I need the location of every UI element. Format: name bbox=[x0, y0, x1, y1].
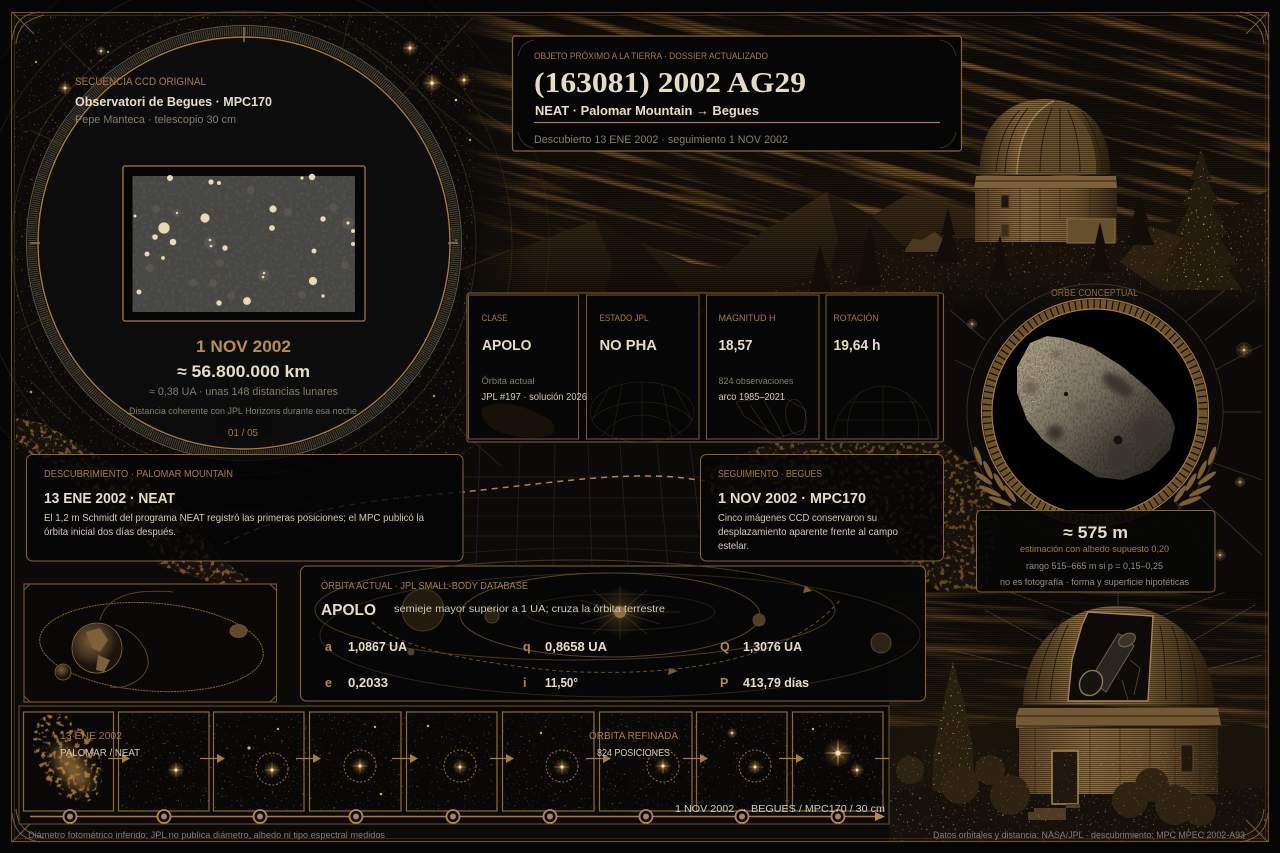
size estimate: estimación con albedo supuesto 0,20 bbox=[1020, 544, 1169, 555]
kicker: OBJETO PRÓXIMO A LA TIERRA · DOSSIER ACTUALIZADO bbox=[534, 51, 768, 62]
distance note: Distancia coherente con JPL Horizons durante esa noche bbox=[129, 406, 357, 417]
map: europe texture bbox=[700, 443, 1000, 602]
orbital elements: 1,3076 UA bbox=[743, 640, 802, 654]
title text: (163081) 2002 AG29 bbox=[534, 67, 806, 99]
icon: star globe sketch bbox=[833, 386, 932, 438]
timeline frames bbox=[24, 712, 883, 811]
dates: Descubierto 13 ENE 2002 · seguimiento 1 NOV 2002 bbox=[534, 134, 788, 146]
map: north america texture bbox=[16, 418, 252, 584]
stat: magnitud: MAGNITUD H bbox=[718, 313, 776, 324]
disclaimer: no es fotografía · forma y superficie hipotéticas bbox=[1000, 577, 1189, 588]
background: grid between panels bbox=[463, 444, 700, 566]
icon: cypress tree texture bbox=[932, 663, 972, 792]
stat: clase: APOLO bbox=[482, 338, 532, 354]
detection stars bbox=[167, 725, 864, 795]
stat: clase: JPL #197 · solución 2026 bbox=[482, 391, 587, 403]
follow-up body: desplazamiento aparente frente al campo bbox=[718, 526, 898, 538]
map: europe bbox=[700, 443, 1000, 602]
orbital elements: 413,79 días bbox=[743, 676, 809, 690]
panel: title bbox=[512, 36, 962, 151]
discovery body: El 1,2 m Schmidt del programa NEAT registró las primeras posiciones; el MPC publicó la bbox=[44, 512, 424, 524]
stat: clase bbox=[482, 313, 587, 403]
follow-up body: Cinco imágenes CCD conservaron su bbox=[718, 512, 877, 524]
icon: cypress tree bbox=[932, 660, 974, 798]
background: engraved sky and mountains bbox=[466, 14, 1270, 311]
panel: current orbit bbox=[300, 560, 926, 701]
follow-up kicker: SEGUIMIENTO · BEGUES bbox=[718, 469, 822, 480]
panel: follow-up bbox=[700, 454, 944, 561]
icon: telescope sketch bbox=[736, 396, 809, 438]
follow-up body: estelar. bbox=[718, 540, 749, 552]
orbital elements: 11,50° bbox=[545, 676, 578, 690]
timeline start label: 13 ENE 2002 bbox=[60, 730, 122, 742]
icon: bushes bbox=[889, 750, 1219, 830]
panel: orbe conceptual background rays bbox=[950, 284, 1262, 560]
stat: estado: ESTADO JPL bbox=[600, 313, 648, 324]
stat: magnitud bbox=[718, 313, 794, 403]
stat: rotacion: 19,64 h bbox=[834, 338, 880, 354]
icon: asteroid marker bbox=[230, 624, 247, 638]
timeline middle label: ÓRBITA REFINADA bbox=[589, 729, 678, 742]
size value: ≈ 575 m bbox=[1063, 524, 1128, 542]
stat: estado bbox=[600, 313, 658, 354]
panel: discovery bbox=[26, 454, 463, 561]
panel: CCD sequence medallion bbox=[26, 26, 462, 460]
orbit illustration bbox=[315, 560, 920, 697]
timeline middle label: 824 POSICIONES bbox=[597, 748, 670, 759]
orbital elements: Q bbox=[720, 640, 730, 654]
stat: magnitud: 824 observaciones bbox=[718, 376, 794, 387]
orbital elements bbox=[325, 640, 809, 690]
stat: magnitud: 18,57 bbox=[718, 338, 752, 354]
arrow: dashed path discovery to follow-up bbox=[224, 476, 705, 544]
sequence counter bbox=[215, 417, 272, 439]
map: north america bbox=[16, 418, 252, 584]
medallion kicker: SECUENCIA CCD ORIGINAL bbox=[75, 76, 206, 88]
orbital elements: q bbox=[523, 640, 531, 654]
icon: upper observatory bbox=[974, 99, 1117, 243]
arrows between frames bbox=[108, 754, 889, 763]
timeline start label bbox=[60, 730, 140, 759]
distance in AU: ≈ 0,38 UA · unas 148 distancias lunares bbox=[149, 386, 338, 398]
timeline end label: 1 NOV 2002 → BEGUES / MPC170 / 30 cm bbox=[675, 803, 885, 815]
stat: clase: CLASE bbox=[482, 313, 508, 324]
orbit kicker: ÓRBITA ACTUAL · JPL SMALL-BODY DATABASE bbox=[321, 579, 528, 592]
star specks bbox=[119, 713, 883, 810]
discovery heading: 13 ENE 2002 · NEAT bbox=[44, 491, 175, 507]
icon: dome sketch bbox=[590, 382, 694, 442]
orbital elements: i bbox=[523, 676, 526, 690]
icon: earth bbox=[72, 623, 122, 673]
panel: asteroid orb bbox=[982, 298, 1208, 526]
panel: asteroid size bbox=[976, 510, 1215, 592]
orbital elements: e bbox=[325, 676, 332, 690]
stat: rotacion bbox=[834, 313, 880, 354]
orbit class: APOLO bbox=[321, 602, 376, 619]
icon: small moon bbox=[55, 664, 71, 680]
orbit description: semieje mayor superior a 1 UA; cruza la órbita terrestre bbox=[394, 603, 665, 615]
background: star chart bbox=[0, 0, 549, 548]
discovery kicker: DESCUBRIMIENTO · PALOMAR MOUNTAIN bbox=[44, 469, 233, 480]
background: lower right landscape with observatory bbox=[889, 592, 1268, 842]
stat: rotacion: ROTACIÓN bbox=[834, 313, 879, 324]
timeline middle label bbox=[589, 729, 678, 759]
orbital elements: P bbox=[720, 676, 728, 690]
panel: earth orbit diagram bbox=[24, 584, 276, 702]
asteroid bbox=[1017, 336, 1175, 480]
orbital elements: 0,2033 bbox=[348, 676, 388, 690]
icon: asteroid sketch bbox=[482, 403, 555, 438]
CCD image frame bbox=[123, 166, 365, 321]
stat: clase: Órbita actual bbox=[482, 376, 534, 387]
distance: ≈ 56.800.000 km bbox=[177, 363, 310, 381]
follow-up heading: 1 NOV 2002 · MPC170 bbox=[718, 491, 866, 507]
timeline axis bbox=[30, 810, 885, 823]
medallion title: Observatori de Begues · MPC170 bbox=[75, 94, 272, 109]
nebula bbox=[19, 702, 117, 814]
footer note: Diámetro fotométrico inferido; JPL no publica diámetro, albedo ni tipo espectral medidos bbox=[28, 830, 385, 841]
panel: stats bbox=[467, 293, 944, 442]
orbital elements: 1,0867 UA bbox=[348, 640, 407, 654]
discovery body: órbita inicial dos días después. bbox=[44, 526, 176, 538]
footer sources: Datos orbitales y distancia: NASA/JPL · descubrimiento: MPC MPEC 2002-A93 bbox=[933, 830, 1245, 841]
icon: lower observatory bbox=[1016, 606, 1221, 820]
orbital elements: a bbox=[325, 640, 333, 654]
date: 1 NOV 2002 bbox=[196, 337, 291, 356]
timeline start label: PALOMAR / NEAT bbox=[60, 748, 140, 759]
icon: pine trees bbox=[808, 148, 1242, 292]
size range: rango 515–665 m si p = 0,15–0,25 bbox=[1026, 561, 1163, 572]
subtitle: NEAT · Palomar Mountain → Begues bbox=[535, 103, 759, 118]
orb label: ORBE CONCEPTUAL bbox=[1051, 288, 1138, 299]
icon: laurel left bbox=[972, 446, 1018, 507]
panel: observation timeline bbox=[19, 702, 889, 824]
sequence counter: 01 / 05 bbox=[228, 427, 258, 439]
stat: estado: NO PHA bbox=[600, 338, 658, 354]
icon: laurel right bbox=[1172, 446, 1218, 507]
medallion credit: Pepe Manteca · telescopio 30 cm bbox=[75, 114, 236, 126]
orbital elements: 0,8658 UA bbox=[545, 640, 607, 654]
stat: magnitud: arco 1985–2021 bbox=[718, 391, 785, 403]
